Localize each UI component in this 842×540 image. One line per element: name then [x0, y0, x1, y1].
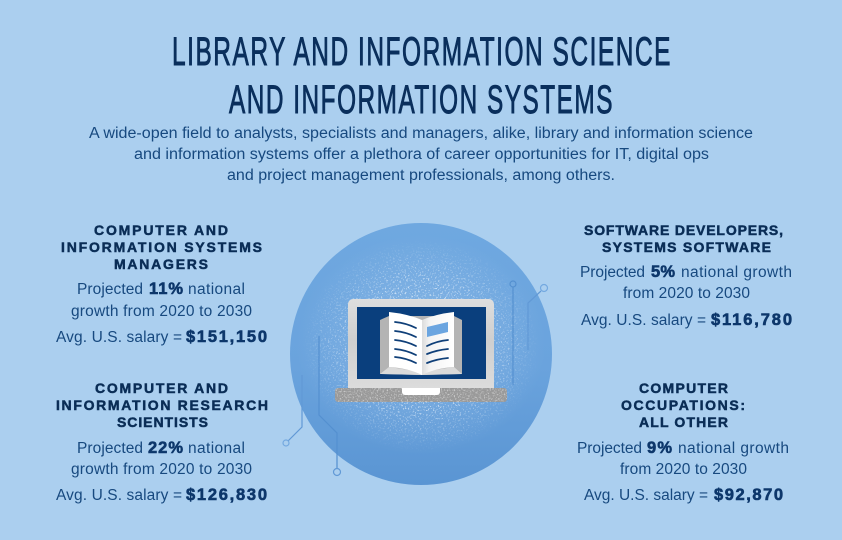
icon: laptop with open book: [335, 299, 507, 402]
growth projection: Projected: [77, 440, 143, 457]
heading: MANAGERS: [114, 256, 208, 272]
growth projection: Projected: [580, 264, 645, 281]
heading: SCIENTISTS: [117, 414, 208, 430]
growth projection: 5%: [651, 263, 675, 281]
heading: ALL OTHER: [639, 414, 728, 430]
laptop lid: [348, 299, 494, 389]
growth projection: [580, 263, 792, 302]
heading: [621, 380, 745, 430]
circuit lines: [283, 281, 548, 476]
intro text: [89, 125, 753, 184]
growth projection: growth from 2020 to 2030: [71, 461, 252, 478]
intro text: and information systems offer a plethora of career opportunities for IT, digital ops: [134, 146, 709, 163]
salary: [56, 486, 267, 504]
heading: COMPUTER AND: [94, 222, 228, 238]
panel: computer and information research scientists: [56, 380, 268, 504]
growth projection: national: [188, 281, 245, 298]
blue circle: [290, 223, 552, 485]
panel: computer and information systems managers: [56, 222, 267, 346]
growth projection: growth from 2020 to 2030: [71, 303, 252, 320]
open book: [380, 312, 462, 375]
heading: [56, 380, 268, 430]
heading: [584, 222, 783, 255]
heading: OCCUPATIONS:: [621, 397, 745, 413]
growth projection: from 2020 to 2030: [623, 285, 750, 302]
laptop screen: [357, 307, 486, 379]
growth projection: 11%: [149, 280, 183, 298]
heading: INFORMATION RESEARCH: [56, 397, 268, 413]
intro text: and project management professionals, among others.: [227, 167, 615, 184]
growth projection: Projected: [77, 281, 143, 298]
growth projection: from 2020 to 2030: [620, 461, 747, 478]
title: [172, 30, 672, 122]
growth projection: Projected: [577, 440, 642, 457]
heading: [61, 222, 262, 272]
salary: Avg. U.S. salary =: [581, 312, 706, 329]
salary: [56, 328, 267, 346]
laptop notch: [402, 388, 440, 395]
growth projection: [71, 280, 252, 320]
heading: COMPUTER AND: [95, 380, 228, 396]
growth projection: national: [188, 440, 245, 457]
salary: Avg. U.S. salary =: [56, 487, 182, 504]
salary: $151,150: [186, 328, 267, 346]
growth projection: national growth: [681, 264, 792, 281]
salary: $126,830: [186, 486, 267, 504]
growth projection: 9%: [647, 439, 672, 457]
growth projection: [577, 439, 789, 478]
growth projection: 22%: [148, 439, 183, 457]
salary: $92,870: [714, 486, 783, 504]
heading: SOFTWARE DEVELOPERS,: [584, 222, 783, 238]
salary: [581, 311, 792, 329]
salary: $116,780: [711, 311, 792, 329]
panel: computer occupations, all other: [577, 380, 789, 504]
intro text: A wide-open field to analysts, specialists and managers, alike, library and information science: [89, 125, 753, 142]
panel: software developers, systems software: [580, 222, 792, 329]
salary: Avg. U.S. salary =: [584, 487, 708, 504]
heading: INFORMATION SYSTEMS: [61, 239, 262, 255]
laptop base: [335, 388, 507, 402]
heading: SYSTEMS SOFTWARE: [602, 239, 771, 255]
salary: Avg. U.S. salary =: [56, 329, 182, 346]
growth projection: national growth: [678, 440, 789, 457]
speckle texture: [306, 244, 536, 448]
salary: [584, 486, 783, 504]
illustration: speckled circle with laptop: [283, 223, 552, 485]
heading: COMPUTER: [639, 380, 728, 396]
growth projection: [71, 439, 252, 478]
